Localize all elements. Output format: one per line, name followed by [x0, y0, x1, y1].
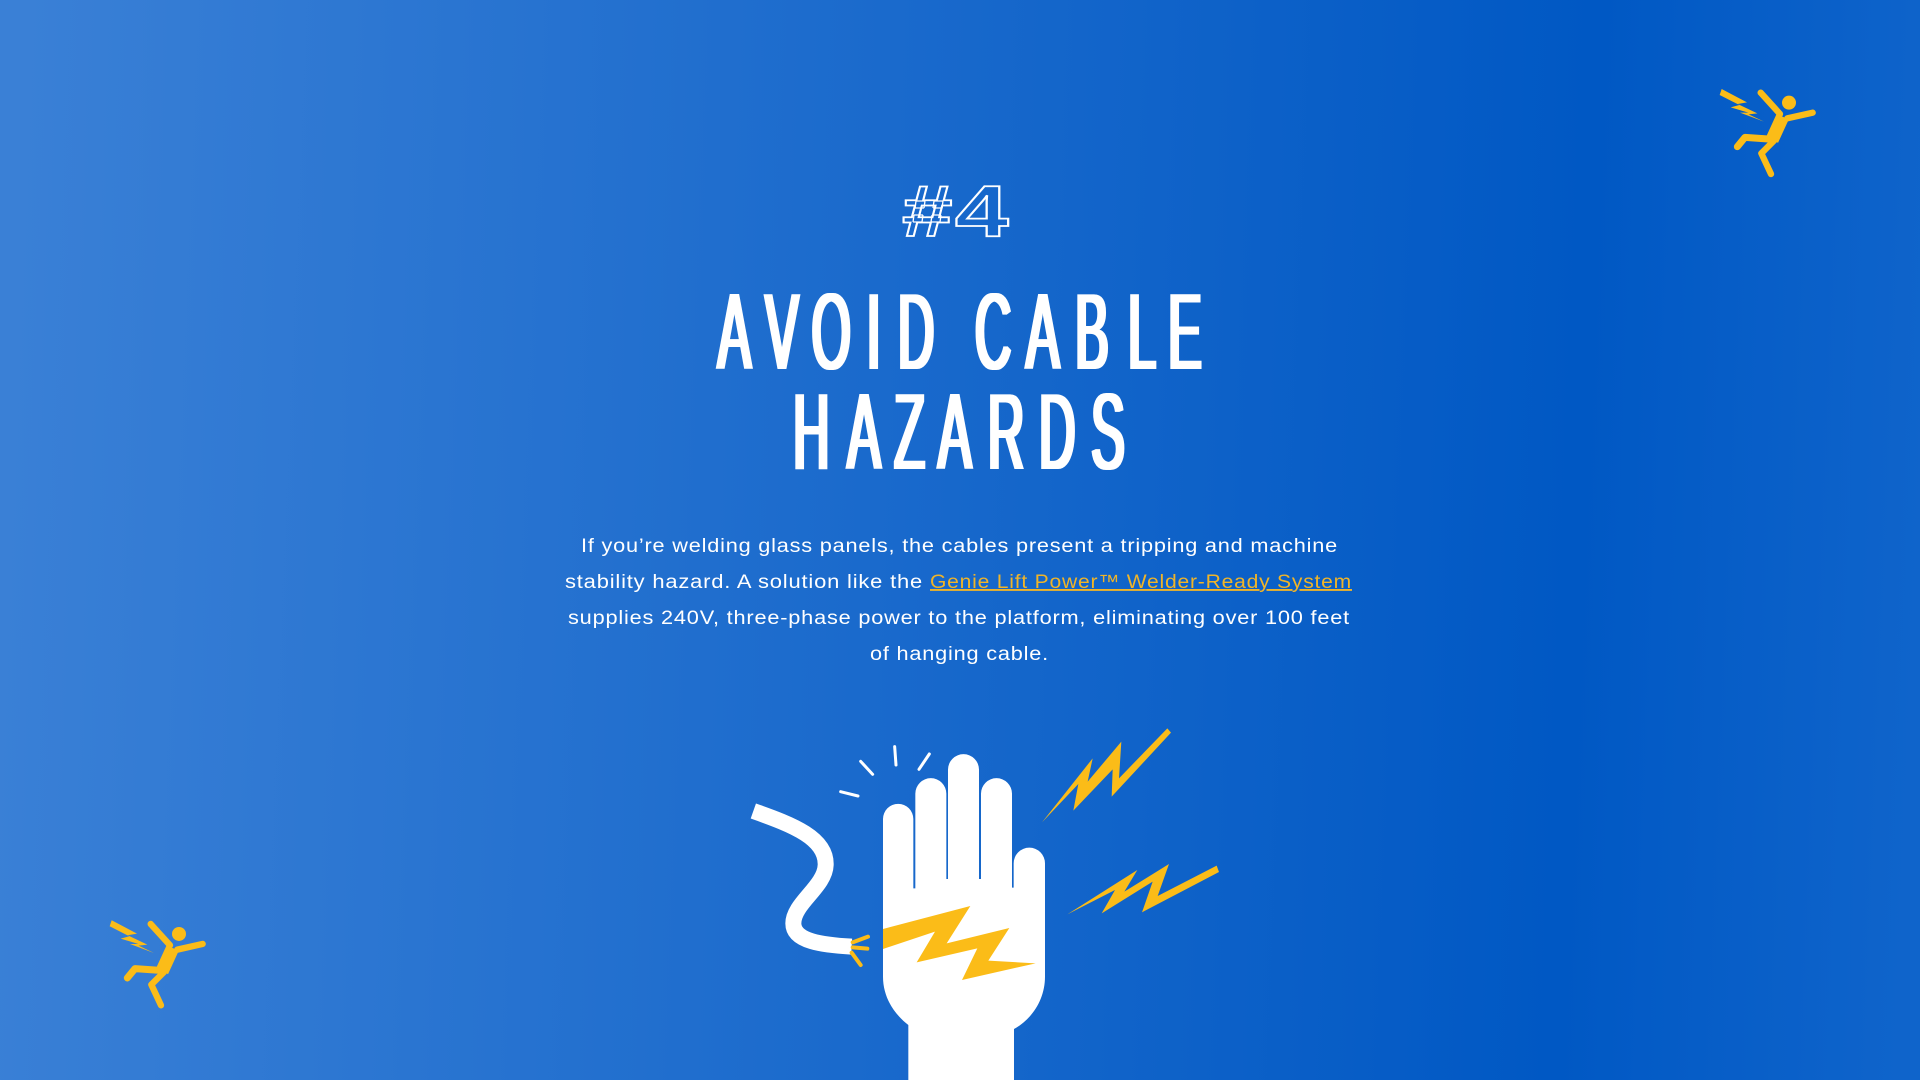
- body text: Genie Lift Power™ Welder-Ready System: [930, 572, 1352, 593]
- icon: bolt on palm: [883, 906, 1036, 980]
- icon: upper lightning bolt: [1042, 728, 1171, 822]
- icon: white hand: [883, 754, 1045, 1080]
- body text: If you’re welding glass panels, the cables present a tripping and machine: [581, 536, 1338, 557]
- icon: falling worker, top right: [1720, 89, 1813, 174]
- number badge: #4: 4: [955, 172, 1009, 252]
- icon: lower lightning bolt: [1067, 864, 1219, 914]
- icon: cut cable: [753, 811, 852, 947]
- title: AVOID CABLE: [718, 270, 1202, 392]
- body text: of hanging cable.: [870, 644, 1049, 665]
- number badge: #4: #: [902, 172, 952, 252]
- title: [718, 270, 1202, 492]
- title: HAZARDS: [793, 370, 1125, 492]
- body text: [565, 536, 1352, 665]
- illustration: electrified hand and cut cable: [753, 728, 1219, 1080]
- number badge: #4: [902, 172, 1009, 252]
- icon: exposed wires: [852, 937, 868, 965]
- body text: stability hazard. A solution like the: [565, 572, 923, 593]
- icon: impact ticks: [841, 747, 929, 796]
- icon: falling worker, bottom left: [110, 920, 203, 1005]
- body text: supplies 240V, three-phase power to the platform, eliminating over 100 feet: [568, 608, 1350, 629]
